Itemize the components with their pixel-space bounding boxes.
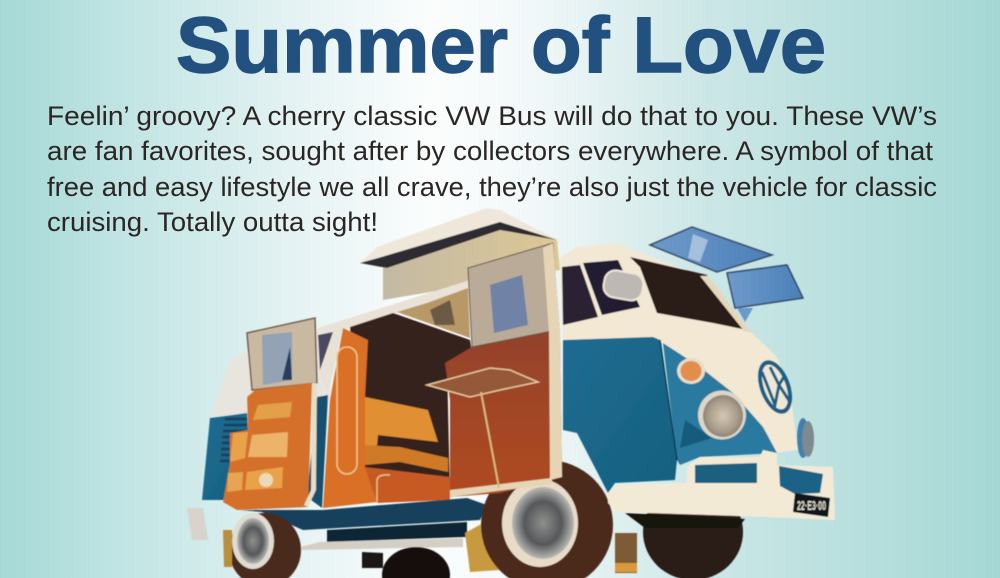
title: Summer of Love: [176, 0, 826, 89]
VW bus illustration: [187, 208, 835, 578]
panel: open rear door with shelves: [223, 318, 317, 510]
icon: mud flap: [615, 533, 637, 573]
panel: orange inner door pillar: [307, 327, 377, 508]
panel: side body blue: [563, 337, 777, 493]
icon: open windscreen panels: [650, 227, 803, 322]
panel: interior: [350, 288, 472, 503]
icon: right side lamp: [797, 418, 814, 458]
icon: front right wheel: [643, 484, 743, 578]
intro text block: cruising. Totally outta sight!: [47, 207, 378, 237]
panel: front cream cap: [560, 243, 798, 453]
icon: rear wheel: [223, 513, 301, 578]
icon: front bumper: [608, 450, 835, 528]
intro text block: Feelin’ groovy? A cherry classic VW Bus will do that to you. These VW’s: [47, 101, 937, 131]
icon: VW badge: [751, 356, 799, 418]
panel: rear body upper and lower: [202, 325, 330, 500]
intro text block: [47, 101, 937, 237]
icon: headlight: [698, 390, 746, 440]
icon: pop-top roof and tent: [360, 208, 573, 300]
intro text block: free and easy lifestyle we all crave, they’re also just the vehicle for classic: [47, 172, 937, 202]
panel: underbody sill: [240, 498, 500, 578]
icon: rear bumper: [187, 508, 208, 540]
icon: wing mirror: [602, 269, 645, 302]
icon: indicator lamp: [677, 358, 705, 384]
panel: main sliding door: [445, 243, 562, 497]
panel: side roof and cream trim: [318, 280, 470, 335]
panel: fold-out table: [427, 368, 538, 488]
icon: front left wheel: [481, 460, 613, 578]
panel: cab windows: [562, 257, 752, 333]
icon: front bumper: 22·E3·00: [797, 498, 826, 513]
intro text block: are fan favorites, sought after by collectors everywhere. A symbol of that: [47, 136, 934, 166]
